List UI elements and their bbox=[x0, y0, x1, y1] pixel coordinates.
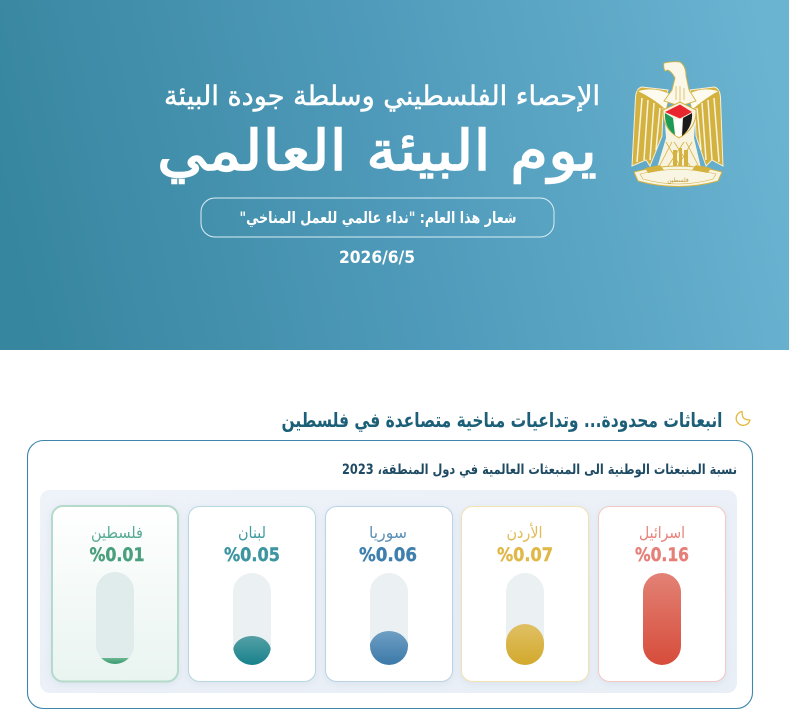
heading: organisations: الإحصاء الفلسطيني وسلطة جودة البيئة bbox=[164, 81, 600, 112]
emblem: Palestinian eagle: فلسطين bbox=[667, 177, 689, 184]
bar card: Israel: %0.16 bbox=[635, 544, 689, 566]
bar card: Syria: %0.06 bbox=[359, 544, 417, 566]
date: 2026/6/5 bbox=[339, 248, 415, 267]
bar card: Syria bbox=[326, 506, 452, 682]
chart background panel bbox=[40, 490, 737, 693]
bar card: Lebanon: %0.05 bbox=[224, 544, 280, 566]
slogan pill: شعار هذا العام: "نداء عالمي للعمل المناخي" bbox=[240, 208, 516, 228]
bar card: Israel bbox=[598, 506, 726, 682]
wings bbox=[632, 87, 668, 166]
bar card: Syria: سوريا bbox=[369, 523, 407, 543]
head bbox=[664, 62, 696, 106]
bar card: Jordan: %0.07 bbox=[497, 544, 553, 566]
emblem: Palestinian eagle bbox=[632, 62, 723, 186]
bar card: Jordan: الأردن bbox=[506, 522, 542, 543]
body and tail bbox=[657, 110, 701, 168]
bar card: Palestine: %0.01 bbox=[90, 544, 144, 566]
ribbon bbox=[634, 166, 722, 186]
bar card: Palestine: فلسطين bbox=[91, 523, 143, 543]
heading: main title: يوم البيئة العالمي bbox=[157, 119, 597, 184]
slogan pill bbox=[201, 198, 554, 237]
header banner bbox=[0, 0, 789, 350]
bar card: Israel: اسرائيل bbox=[639, 523, 685, 543]
bar card: Jordan bbox=[462, 506, 588, 682]
panel: emissions chart card bbox=[28, 440, 752, 708]
shield bbox=[663, 102, 696, 138]
bar card: Palestine bbox=[52, 506, 178, 682]
icon: crescent pie bbox=[736, 412, 750, 425]
bar card: Lebanon bbox=[188, 506, 316, 682]
bar card: Lebanon: لبنان bbox=[238, 523, 266, 542]
